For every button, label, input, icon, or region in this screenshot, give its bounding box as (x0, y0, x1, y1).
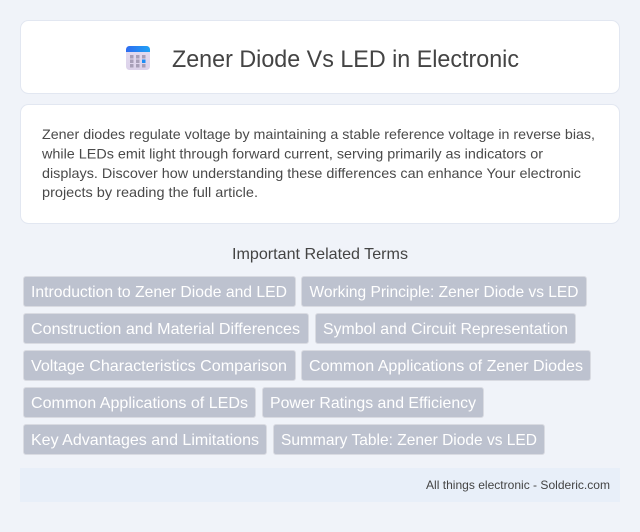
heading: important related terms: Important Related Terms (232, 246, 408, 263)
tag: advantages (24, 424, 266, 454)
footer credit: All things electronic - Solderic.com (426, 478, 610, 492)
tag: voltage (24, 350, 296, 380)
tag: advantages: Key Advantages and Limitations (31, 432, 259, 449)
tag: introduction: Introduction to Zener Diode and LED (31, 284, 287, 301)
tag: working principle (302, 276, 586, 306)
tag: construction: Construction and Material Differences (31, 321, 300, 338)
tag: led applications: Common Applications of LEDs (31, 395, 248, 412)
tag: zener applications: Common Applications of Zener Diodes (309, 358, 583, 375)
tag: working principle: Working Principle: Zener Diode vs LED (310, 284, 578, 301)
description text: displays. Discover how understanding these differences can enhance Your electronic (42, 165, 581, 181)
footer (20, 468, 620, 502)
tag: construction (24, 314, 308, 344)
panel: description (20, 104, 620, 224)
tag: led applications (24, 388, 256, 418)
description text (41, 126, 595, 200)
tag: power ratings (262, 388, 484, 418)
tag: summary table: Summary Table: Zener Diode vs LED (281, 432, 537, 449)
description text: Zener diodes regulate voltage by maintaining a stable reference voltage in reverse bias, (42, 126, 595, 142)
description text: projects by reading the full article. (42, 184, 258, 200)
tag: power ratings: Power Ratings and Efficiency (270, 395, 476, 412)
tag: symbol: Symbol and Circuit Representation (323, 321, 568, 338)
icon: calendar grid (126, 46, 150, 70)
tag: introduction (24, 276, 296, 306)
header panel (20, 20, 620, 94)
tag: zener applications (302, 350, 590, 380)
tag list (24, 276, 590, 454)
tag: voltage: Voltage Characteristics Comparison (31, 358, 287, 375)
tag: symbol (316, 314, 576, 344)
description text: while LEDs emit light through forward current, serving primarily as indicators or (41, 146, 543, 162)
title: Zener Diode Vs LED in Electronic (172, 46, 519, 73)
tag: summary table (274, 424, 544, 454)
